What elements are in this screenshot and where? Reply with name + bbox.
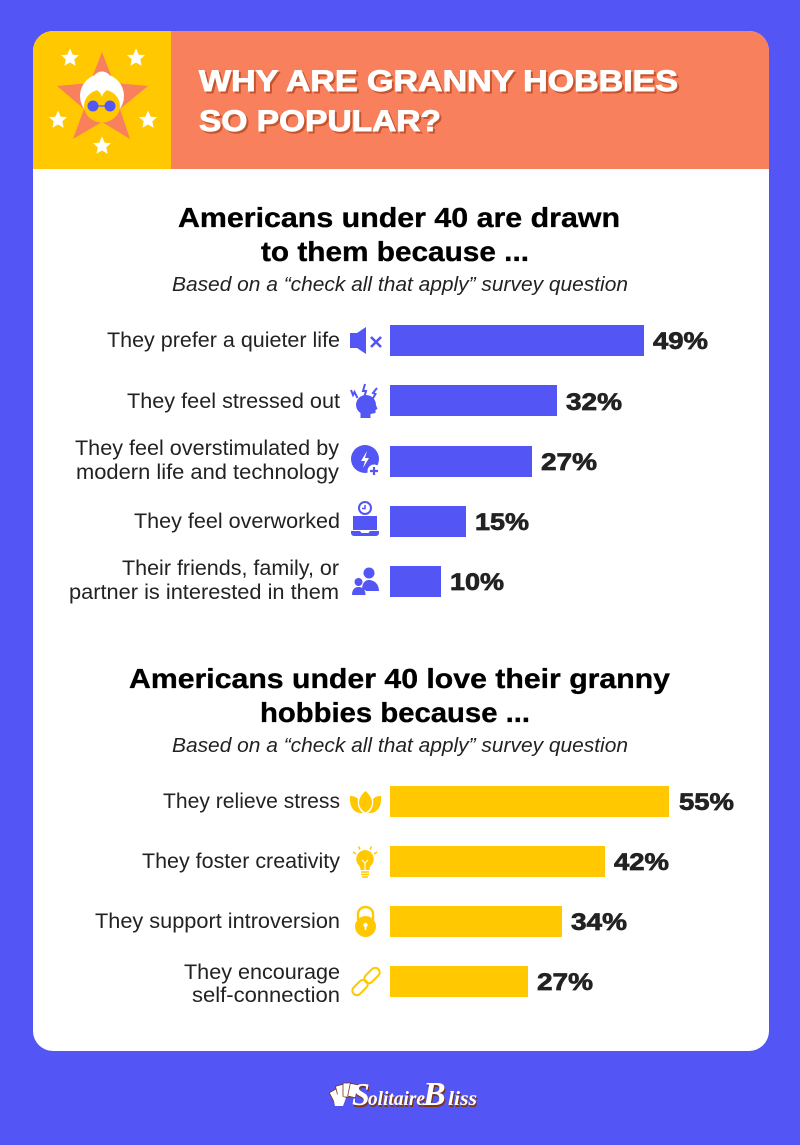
row: stressed <box>127 384 622 418</box>
title <box>199 65 680 140</box>
title banner <box>171 31 769 169</box>
title: SO POPULAR? <box>201 107 443 140</box>
wordmark <box>352 1076 478 1115</box>
icon: laptop and clock <box>351 502 379 536</box>
row: relieve stress: 55% <box>679 789 734 816</box>
icon: padlock <box>355 907 376 937</box>
icon: energy bolt plus <box>351 445 380 478</box>
title: SO POPULAR? <box>199 105 441 138</box>
row: self-connection <box>184 961 593 1007</box>
row: friends and family <box>69 557 504 604</box>
heading: Americans under 40 are drawn <box>178 202 620 233</box>
row: friends and family: Their friends, family, or <box>122 557 339 580</box>
wordmark: liss <box>448 1088 477 1110</box>
row: foster creativity: They foster creativity <box>142 850 341 873</box>
wordmark: B <box>423 1078 447 1115</box>
icon: lotus <box>350 791 381 813</box>
icon: granny in star <box>33 31 171 169</box>
row: quieter life: They prefer a quieter life <box>107 329 340 352</box>
section: love their hobbies <box>95 663 734 1007</box>
wordmark: olitaire <box>369 1090 426 1112</box>
heading <box>178 202 620 267</box>
logo: Solitaire Bliss <box>329 1076 478 1115</box>
row: overstimulated: modern life and technology <box>76 461 340 484</box>
wordmark: S <box>352 1076 370 1112</box>
row: overstimulated <box>75 437 597 484</box>
row: relieve stress: They relieve stress <box>163 790 340 813</box>
subheading: Based on a “check all that apply” survey question <box>172 274 628 296</box>
row: overworked: 15% <box>475 509 529 536</box>
title: WHY ARE GRANNY HOBBIES <box>199 65 678 98</box>
wordmark: S <box>353 1078 371 1114</box>
row: friends and family: 10% <box>450 569 504 596</box>
row: self-connection: They encourage <box>184 961 340 984</box>
icon: muted speaker <box>350 327 381 354</box>
row: foster creativity: 42% <box>614 849 669 876</box>
row: friends and family: partner is interested in them <box>69 581 339 604</box>
row: stressed: They feel stressed out <box>127 390 340 413</box>
row: self-connection: self-connection <box>192 984 340 1007</box>
heading: hobbies because ... <box>260 697 530 728</box>
wordmark: olitaire <box>368 1088 425 1110</box>
row: support introversion: They support introversion <box>95 910 340 933</box>
row: self-connection: 27% <box>537 969 593 996</box>
row: stressed: 32% <box>566 389 622 416</box>
wordmark: liss <box>449 1090 478 1112</box>
row: overworked <box>134 502 529 537</box>
wordmark: B <box>422 1076 446 1113</box>
icon: people <box>352 568 379 595</box>
heading <box>129 663 670 728</box>
heading: to them because ... <box>261 236 529 267</box>
row: quieter life: 49% <box>653 328 708 355</box>
row: quieter life <box>107 325 708 356</box>
subheading: Based on a “check all that apply” survey question <box>172 735 628 757</box>
icon: stressed head <box>351 384 378 418</box>
heading: Americans under 40 love their granny <box>129 663 670 694</box>
row: support introversion <box>95 906 627 937</box>
row: overworked: They feel overworked <box>134 510 340 533</box>
row: overstimulated: They feel overstimulated by <box>75 437 340 460</box>
icon: light bulb <box>353 846 377 877</box>
section: drawn to them <box>69 202 708 604</box>
row: support introversion: 34% <box>571 909 627 936</box>
icon: chain link <box>350 966 382 997</box>
icon: playing cards <box>329 1083 358 1106</box>
title: WHY ARE GRANNY HOBBIES <box>201 67 680 100</box>
row: relieve stress <box>163 786 734 817</box>
row: overstimulated: 27% <box>541 449 597 476</box>
row: foster creativity <box>142 846 669 877</box>
